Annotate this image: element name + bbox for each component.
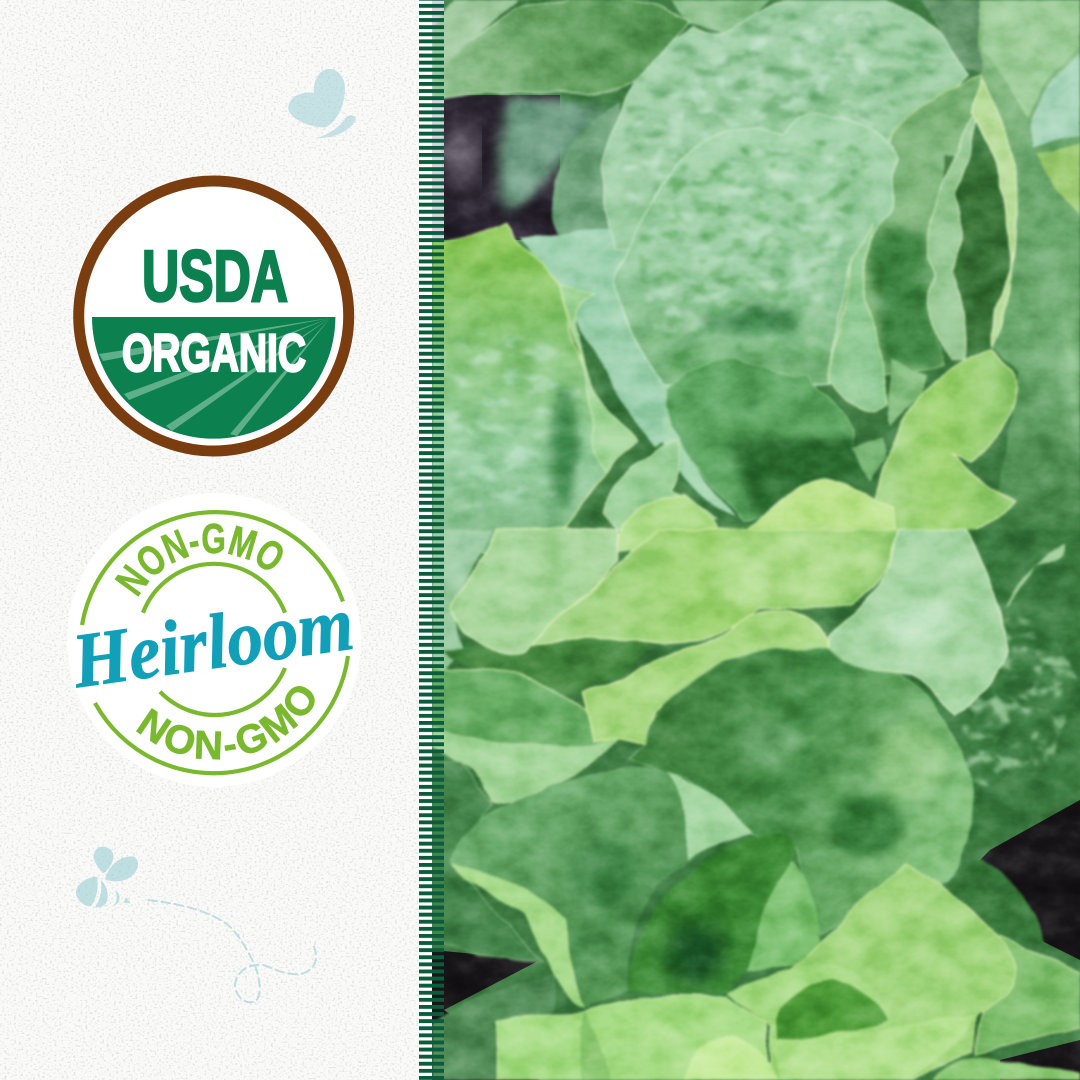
- pale right leaf: [829, 530, 1008, 714]
- icon: bee with dashed flight path: [76, 847, 316, 1002]
- icon: butterfly: [288, 69, 356, 138]
- badge: Non-GMO Heirloom: [66, 493, 361, 787]
- badge rings: [82, 512, 348, 773]
- lettuce leaves: [420, 0, 1080, 1080]
- panel: lettuce photograph: [420, 0, 1080, 1080]
- back pale leaf: [519, 226, 670, 448]
- lower lettuce leaves: [420, 530, 1080, 1080]
- heading: USDA: USDA: [142, 237, 288, 317]
- badge white halo: [67, 493, 361, 787]
- lower left cupped leaf: [448, 769, 752, 1008]
- text: Heirloom script: Heirloom: [66, 579, 358, 704]
- large top leaf: [602, 0, 967, 248]
- long bright leaf: [529, 530, 898, 647]
- big dark centre leaf: [627, 648, 973, 936]
- lower central dark leaf: [663, 358, 874, 520]
- upper lettuce leaves: [420, 0, 1080, 551]
- left large leaf: [420, 224, 606, 551]
- dark inner leaf: [627, 834, 795, 995]
- text: Non-GMO top: NON-GMO: [114, 523, 283, 597]
- panel: linen background: [0, 0, 432, 1080]
- leaf texture overlay: [444, 0, 1080, 1080]
- badge: USDA Organic: [79, 181, 349, 451]
- heading: ORGANIC: ORGANIC: [122, 324, 306, 383]
- left frilly leaf: [450, 530, 618, 655]
- bright front leaf: [768, 864, 1017, 1080]
- decorative striped border: [419, 0, 444, 1080]
- badge rays: [99, 318, 330, 436]
- text: Non-GMO bottom: NON-GMO: [136, 686, 315, 760]
- badge field: [92, 317, 335, 439]
- central large leaf: [614, 113, 896, 386]
- badge ring: [79, 181, 349, 451]
